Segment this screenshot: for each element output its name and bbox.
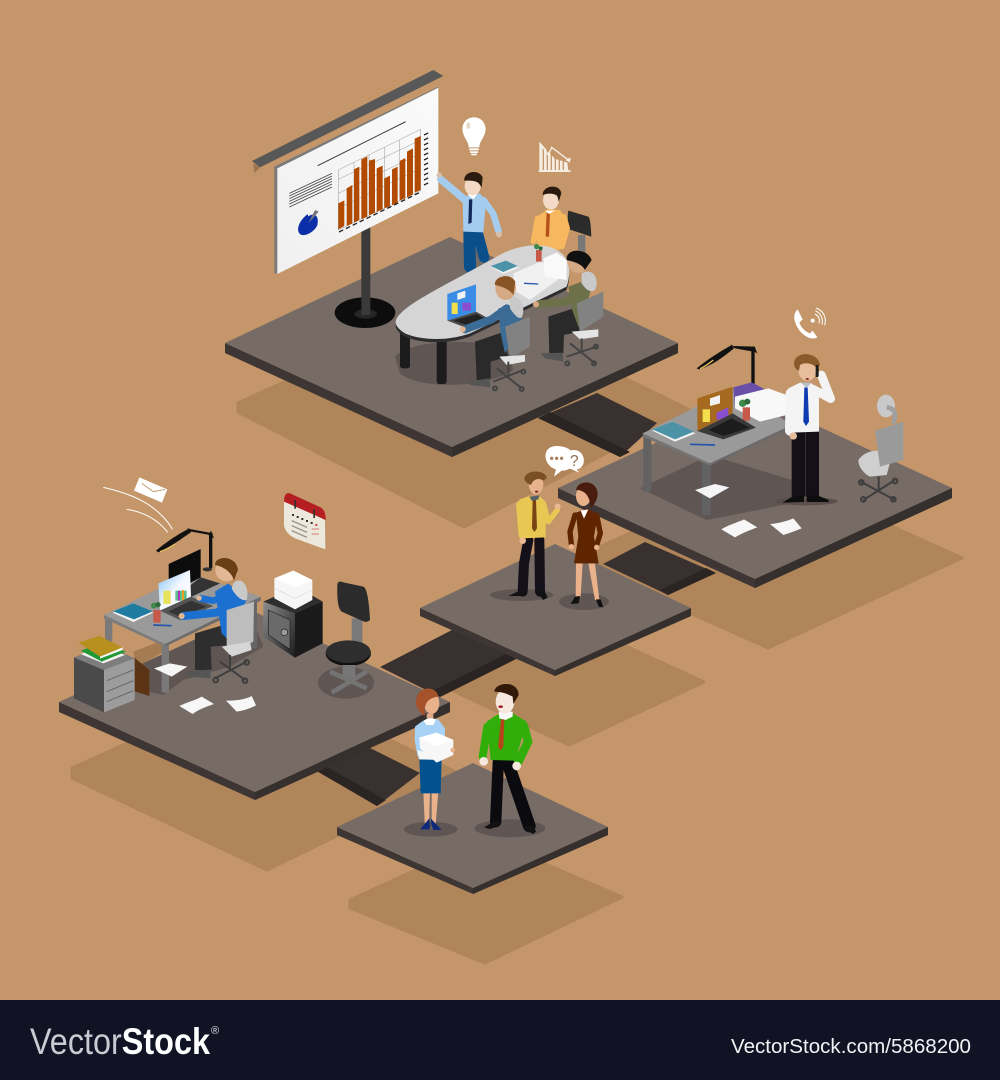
- stationery and laptop: [652, 382, 787, 445]
- icon: speech bubbles: ?: [570, 453, 579, 470]
- papers on floor: [179, 696, 256, 714]
- presentation stand: [335, 227, 395, 328]
- platform: phone desk floor: [558, 397, 952, 588]
- connector walkways: [315, 393, 716, 806]
- icon: flying mail: [103, 477, 173, 532]
- papers on floor: [721, 518, 802, 537]
- scene: phone desk: [640, 308, 903, 537]
- presenter: [437, 172, 502, 267]
- icon: calendar: [284, 493, 326, 549]
- chair base: [565, 338, 598, 365]
- floor shadows under people: [404, 589, 609, 837]
- seated man left: [460, 276, 530, 391]
- chair back and worker: [179, 558, 254, 683]
- woman with box: [415, 688, 455, 830]
- paper under desk: [154, 663, 187, 677]
- bar chart: [338, 129, 429, 232]
- icon: phone signal: [794, 308, 825, 338]
- woman in brown dress: [569, 482, 603, 607]
- safe with paper stack: [263, 571, 323, 658]
- floor shadows: [72, 300, 962, 963]
- platform: meeting room floor: [225, 237, 678, 457]
- scene: work desk: [74, 477, 374, 714]
- office chair: [858, 395, 903, 502]
- scene: conversation and handover: [404, 446, 609, 837]
- chair behind table: [568, 211, 591, 253]
- desk shadow on floor: [134, 614, 263, 695]
- seated man right: [533, 250, 603, 365]
- image id text: VectorStock.com/5868200: [731, 1036, 971, 1058]
- desk: [643, 387, 792, 515]
- swivel chair: [318, 582, 374, 699]
- stationery: [113, 602, 172, 626]
- platform: work desk floor: [59, 612, 450, 800]
- VectorStock logo text: VectorStock: [30, 1021, 210, 1062]
- icon: speech bubbles: [546, 446, 584, 477]
- standing man on phone: [774, 354, 838, 505]
- footer band: [0, 1000, 1000, 1080]
- cabinet with books: [74, 636, 135, 712]
- desk lamp: [156, 528, 214, 571]
- chair base: [493, 362, 525, 391]
- platform: conversation floor: [420, 544, 691, 676]
- second laptop: [169, 549, 220, 597]
- pie chart: [298, 210, 319, 235]
- presentation board: [252, 70, 443, 274]
- platform: handover floor: [337, 763, 608, 894]
- desk shadow: [640, 455, 792, 520]
- icon: light bulb: [462, 117, 486, 155]
- registered mark: ®: [211, 1025, 219, 1037]
- board text lines: [289, 173, 332, 207]
- laptop on table: [447, 284, 494, 327]
- desk lamp: [697, 344, 757, 385]
- briefcase: [134, 657, 149, 696]
- meeting table: [396, 245, 569, 384]
- man in green: [479, 684, 536, 834]
- main laptop: [158, 570, 213, 620]
- icon: falling chart: [539, 142, 571, 172]
- documents on table: [491, 244, 567, 300]
- table shadow: [395, 342, 513, 385]
- desk shadow on ground: [133, 640, 167, 667]
- scene: meeting room: [252, 70, 603, 391]
- desk: [104, 573, 261, 693]
- paper under desk: [695, 484, 729, 498]
- man in orange: [533, 187, 567, 250]
- man in yellow: [508, 471, 561, 600]
